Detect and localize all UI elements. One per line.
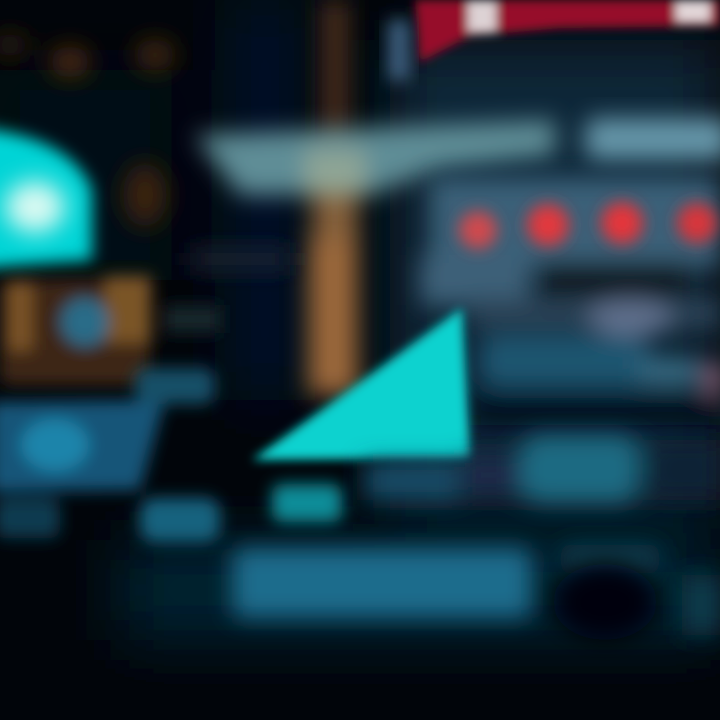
dark circle lower right	[553, 564, 657, 640]
lower blue blocks	[365, 435, 720, 503]
blue left panel	[0, 368, 220, 542]
left edge pale band beside banner	[388, 20, 410, 80]
top left brown blobs	[0, 33, 175, 227]
small cyan tag	[272, 484, 342, 522]
cyan triangle chart	[252, 308, 470, 460]
cyan glow panel	[0, 128, 92, 268]
right heading text band	[585, 118, 720, 160]
top red banner	[415, 0, 720, 62]
brown block with blue circle	[0, 276, 220, 385]
bottom blue band	[232, 545, 720, 635]
red dots row	[459, 202, 717, 249]
winged heading text band	[190, 120, 555, 268]
vertical tan bar	[308, 0, 358, 395]
right panel	[420, 178, 720, 425]
